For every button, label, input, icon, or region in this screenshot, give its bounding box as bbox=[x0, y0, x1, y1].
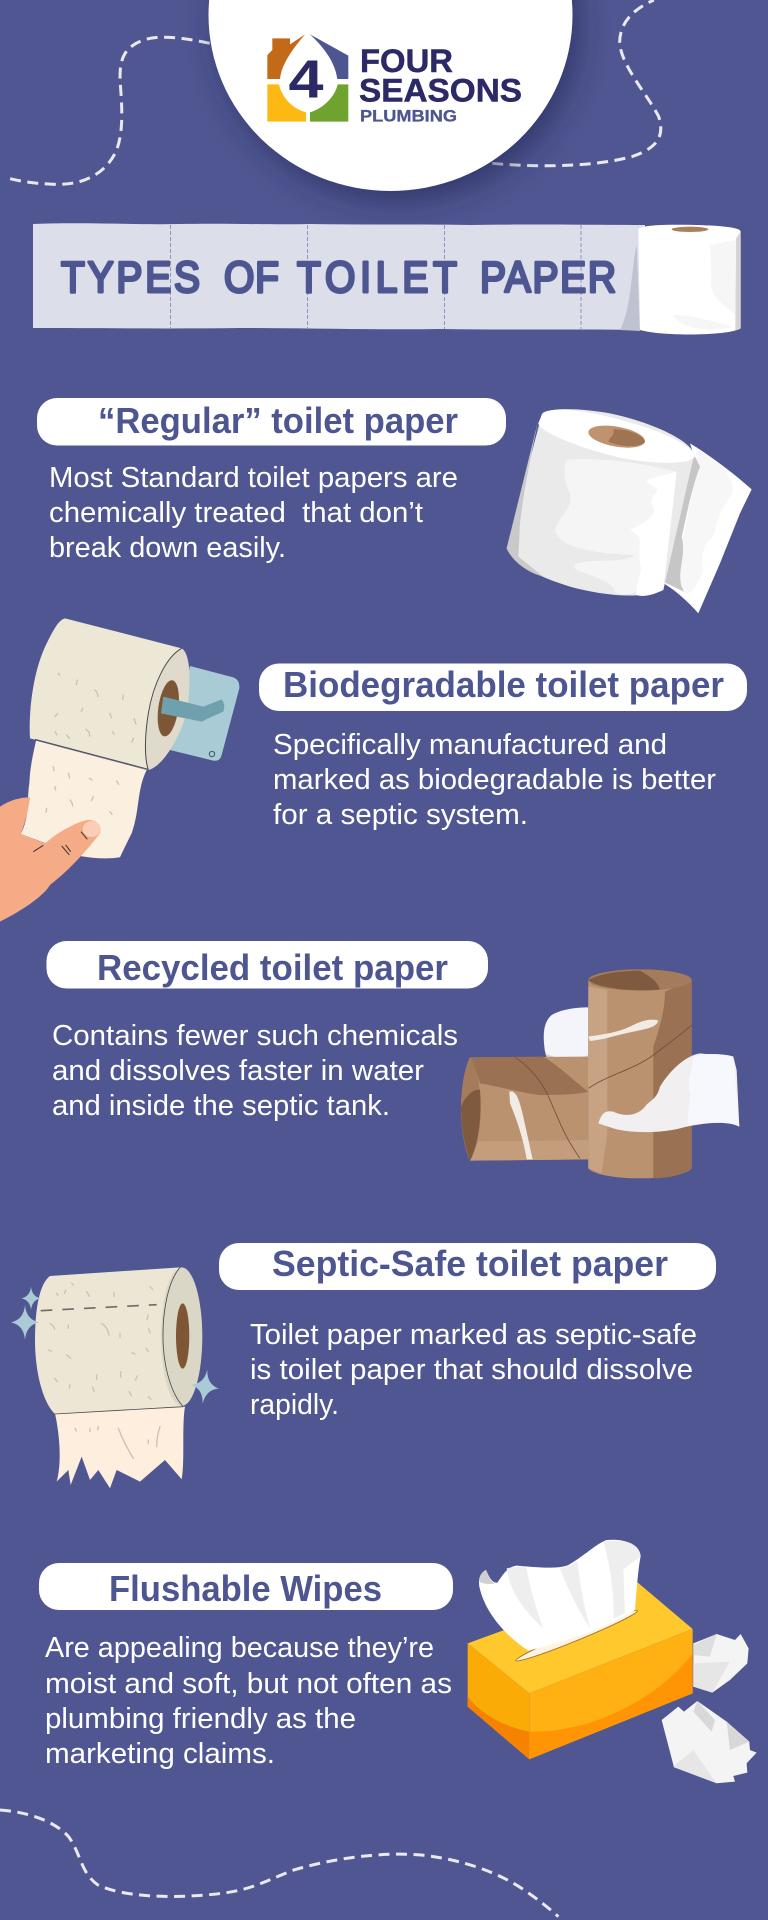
text: biodegradable: Specifically manufactured and bbox=[273, 729, 667, 761]
text: recycled bbox=[52, 1020, 458, 1122]
heading: flushable wipes bbox=[39, 1563, 453, 1610]
text: biodegradable bbox=[273, 729, 716, 831]
title banner: unrolled paper bbox=[33, 223, 741, 334]
icon: empty cardboard tubes with tissue bbox=[461, 969, 739, 1178]
text: recycled: and dissolves faster in water bbox=[52, 1055, 424, 1087]
text: flushable wipes: plumbing friendly as the bbox=[45, 1703, 356, 1735]
heading: septic-safe: Septic-Safe toilet paper bbox=[272, 1243, 668, 1284]
heading: flushable wipes: Flushable Wipes bbox=[109, 1568, 382, 1609]
icon: beige toilet roll with sparkles bbox=[11, 1267, 221, 1488]
text: septic-safe: is toilet paper that should dissolve bbox=[250, 1354, 693, 1386]
text: recycled: and inside the septic tank. bbox=[52, 1090, 390, 1122]
logo: house and water drop mark bbox=[267, 34, 348, 122]
panel: biodegradable toilet paper bbox=[0, 618, 747, 922]
heading: regular bbox=[37, 398, 506, 446]
text: regular: chemically treated that don’t bbox=[49, 497, 423, 529]
text: regular: break down easily. bbox=[49, 532, 286, 564]
logo: house and water drop mark: 4 bbox=[288, 50, 324, 110]
dashed path: top right bbox=[492, 0, 661, 166]
text: septic-safe: rapidly. bbox=[250, 1389, 339, 1421]
icon: tissue box with crumpled tissues bbox=[468, 1540, 757, 1783]
icon: hand pulling roll from holder bbox=[0, 618, 239, 922]
logo: wordmark: PLUMBING bbox=[360, 108, 457, 126]
logo: wordmark: SEASONS bbox=[359, 72, 522, 108]
title: PAPER bbox=[480, 253, 616, 301]
icon: white toilet roll bbox=[507, 409, 752, 613]
text: biodegradable: marked as biodegradable is better bbox=[273, 764, 716, 796]
dashed path: top left bbox=[5, 37, 210, 184]
logo: wordmark bbox=[359, 43, 522, 126]
text: flushable wipes: Are appealing because they’re bbox=[45, 1632, 434, 1664]
text: flushable wipes: moist and soft, but not often as bbox=[45, 1668, 452, 1700]
heading: recycled: Recycled toilet paper bbox=[97, 947, 448, 988]
title bbox=[61, 253, 616, 301]
text: regular bbox=[49, 462, 458, 564]
heading: regular: “Regular” toilet paper bbox=[98, 400, 458, 441]
text: septic-safe: Toilet paper marked as septic-safe bbox=[250, 1319, 697, 1351]
logo: wordmark: FOUR bbox=[360, 43, 453, 79]
text: recycled: Contains fewer such chemicals bbox=[52, 1020, 458, 1052]
text: flushable wipes bbox=[45, 1632, 452, 1770]
title: OF bbox=[224, 253, 279, 301]
panel: recycled toilet paper bbox=[46, 941, 739, 1178]
dashed path: bottom bbox=[0, 1810, 558, 1917]
heading: biodegradable: Biodegradable toilet paper bbox=[283, 664, 724, 705]
panel: septic-safe toilet paper bbox=[11, 1243, 716, 1488]
panel: regular toilet paper bbox=[37, 398, 752, 613]
title: TYPES bbox=[61, 253, 200, 301]
text: biodegradable: for a septic system. bbox=[273, 799, 528, 831]
icon: paper roll bbox=[620, 225, 741, 334]
text: septic-safe bbox=[250, 1319, 697, 1421]
text: flushable wipes: marketing claims. bbox=[45, 1738, 275, 1770]
text: regular: Most Standard toilet papers are bbox=[49, 462, 458, 494]
title: TOILET bbox=[297, 253, 457, 301]
panel: flushable wipes bbox=[39, 1540, 757, 1783]
logo badge bbox=[208, 0, 580, 202]
